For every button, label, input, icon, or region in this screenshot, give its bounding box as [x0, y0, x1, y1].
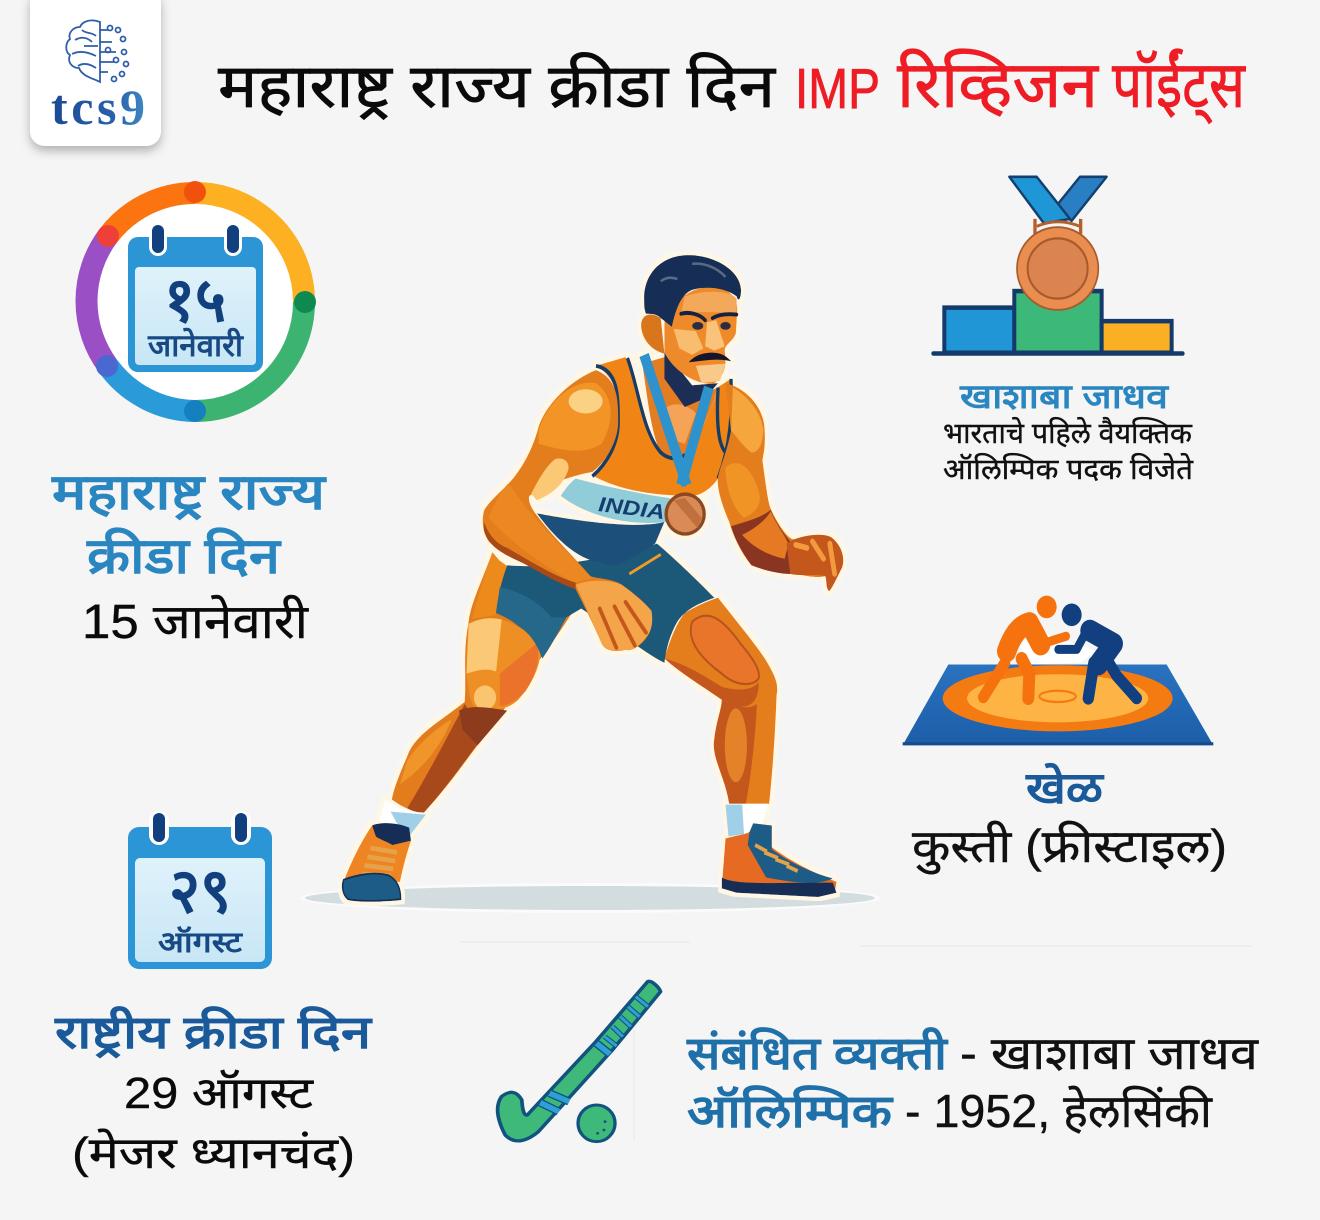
- text block: National sports day: राष्ट्रीय क्रीडा दिन: [54, 1006, 373, 1059]
- stick lower stripes: [540, 1043, 610, 1112]
- calendar date: २९: [169, 857, 231, 926]
- text block: National sports day: 29 ऑगस्ट: [124, 1069, 314, 1118]
- logo: tcs9: [30, 0, 161, 146]
- calendar month: जानेवारी: [147, 327, 244, 363]
- title: [218, 48, 1246, 125]
- back foot: [343, 799, 426, 901]
- text block: Khashaba Jadhav: ऑलिम्पिक पदक विजेते: [943, 453, 1193, 486]
- front leg: [664, 598, 777, 804]
- icon: medal on podium: [931, 177, 1185, 356]
- illustration: wrestler: [343, 255, 843, 901]
- neck shadow: [664, 351, 718, 407]
- calendar month: ऑगस्ट: [158, 926, 244, 959]
- left arm: [483, 370, 652, 651]
- shorts: [496, 544, 714, 663]
- title black part: महाराष्ट्र राज्य क्रीडा दिन: [218, 52, 776, 120]
- podium: [944, 291, 1172, 353]
- text block: Khashaba Jadhav: [943, 378, 1193, 486]
- title revision: रिव्हिजन: [897, 48, 1099, 121]
- icon: hockey stick and ball: [498, 981, 661, 1142]
- medal ribbon: [644, 355, 709, 485]
- front foot: [722, 804, 836, 897]
- text block: sport: खेळ: [1025, 762, 1105, 813]
- hair: [644, 255, 741, 327]
- ground shadow: [300, 883, 880, 913]
- icon: calendar, 29 August: [128, 811, 272, 969]
- title points: पॉईंट्स: [1112, 48, 1246, 125]
- medal: [664, 492, 706, 536]
- text block: related person and Olympics: - खाशाबा जाधव: [960, 1027, 1260, 1079]
- blue wrestler: [1058, 604, 1137, 698]
- text block: sport: [912, 762, 1227, 875]
- title IMP: IMP: [795, 57, 880, 121]
- calendar date: १५: [164, 266, 226, 335]
- logo wordmark: tcs9: [51, 79, 145, 135]
- bronze medal: [1017, 227, 1098, 310]
- head: [641, 255, 741, 384]
- ribbon: [1009, 177, 1107, 223]
- text block: related person and Olympics: [686, 1027, 1260, 1137]
- text block: Maharashtra state sports day: [51, 464, 327, 649]
- mat: [903, 664, 1213, 745]
- text block: sport: कुस्ती (फ्रीस्टाइल): [912, 820, 1227, 875]
- text block: National sports day: (मेजर ध्यानचंद): [72, 1128, 355, 1178]
- right arm: [718, 383, 843, 591]
- text block: Maharashtra state sports day: 15 जानेवारी: [82, 594, 310, 649]
- text block: related person and Olympics: संबंधित व्यक्ती: [686, 1027, 949, 1079]
- vest belly: [537, 513, 664, 565]
- icon: wrestlers on mat: [903, 596, 1213, 745]
- text block: Khashaba Jadhav: खाशाबा जाधव: [959, 378, 1169, 416]
- vest label: INDIA: [597, 493, 666, 525]
- text block: related person and Olympics: ऑलिम्पिक: [687, 1085, 894, 1137]
- vest: [592, 357, 731, 496]
- text block: Maharashtra state sports day: महाराष्ट्र राज्य: [51, 464, 327, 521]
- icon: brain circuit: [66, 20, 128, 82]
- icon: calendar in colour ring, 15 January: [86, 181, 316, 422]
- text block: Khashaba Jadhav: भारताचे पहिले वैयक्तिक: [943, 417, 1193, 450]
- orange wrestler: [983, 596, 1066, 698]
- text block: National sports day: [54, 1006, 373, 1178]
- back leg: [392, 552, 572, 812]
- text block: related person and Olympics: - 1952, हेलसिंकी: [905, 1085, 1213, 1137]
- text block: Maharashtra state sports day: क्रीडा दिन: [86, 527, 283, 584]
